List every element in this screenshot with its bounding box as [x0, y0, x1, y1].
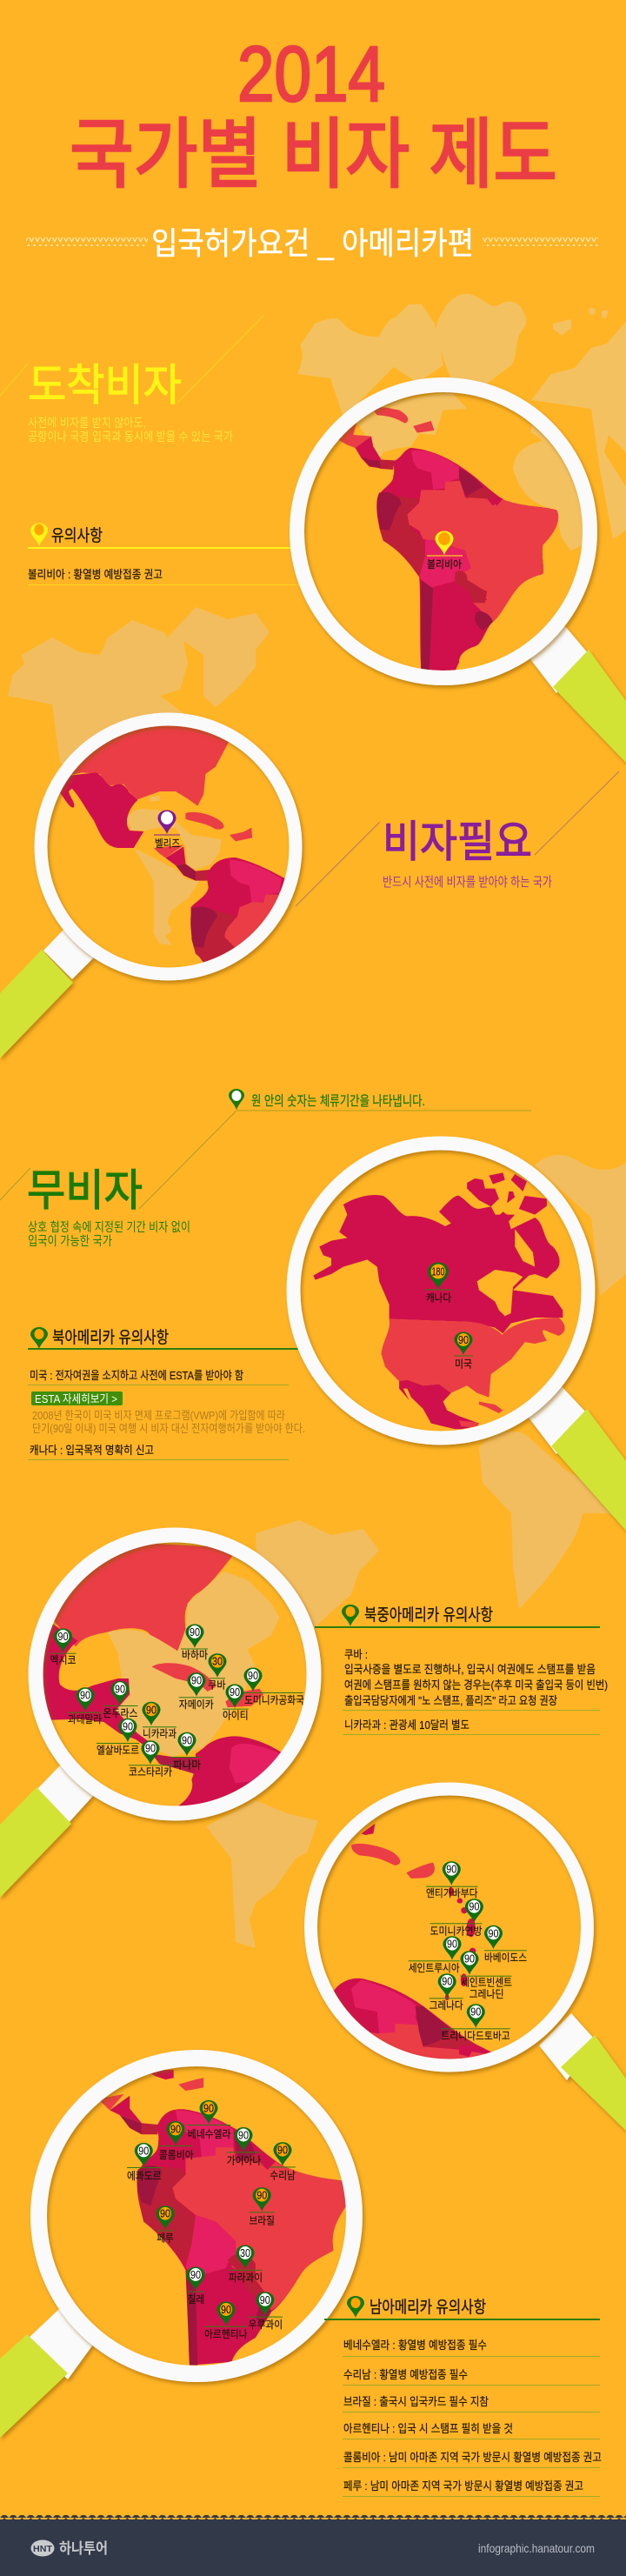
pin: Dominican Republic: 90: [248, 1670, 258, 1682]
notes list: South America: 브라질 : 출국시 입국카드 필수 지참: [343, 2395, 489, 2408]
pin: Chile: [186, 2266, 205, 2306]
pin: Venezuela: 베네수엘라: [188, 2128, 230, 2140]
ESTA button: ESTA 자세히보기 >: [35, 1392, 117, 1405]
arrival visa description: [28, 416, 233, 444]
pin: Antigua and Barbuda: 앤티가바부다: [426, 1887, 478, 1899]
pin: Haiti: 아이티: [223, 1710, 249, 1722]
pin: El Salvador: 엘살바도르: [97, 1745, 139, 1757]
pin: Venezuela: [188, 2100, 230, 2140]
pin: Costa Rica: 90: [145, 1743, 156, 1755]
pin: Brazil: 브라질: [250, 2214, 275, 2226]
pin: Costa Rica: 코스타리카: [129, 1766, 172, 1779]
pin: Dominican Republic: 도미니카공화국: [244, 1694, 304, 1706]
pin: Honduras: [103, 1681, 137, 1719]
magnifier: Central America: [0, 1535, 314, 1898]
pin: Antigua and Barbuda: [426, 1861, 478, 1899]
pin: Jamaica: 자메이카: [179, 1698, 214, 1711]
pin: Saint Vincent and the Grenadines: 세인트빈센트: [461, 1977, 512, 1989]
pin: Bolivia: 볼리비아: [427, 558, 462, 571]
pin: Guyana: [227, 2127, 261, 2166]
pin: Colombia: 90: [170, 2124, 181, 2136]
notes heading: arrival visa: 유의사항: [51, 526, 103, 545]
pin: Canada 180: 캐나다: [426, 1292, 451, 1305]
notes list: South America: 수리남 : 황열병 예방접종 필수: [343, 2368, 468, 2381]
notes heading: North America: [28, 1327, 298, 1350]
pin: Uruguay: 우루과이: [249, 2319, 283, 2331]
pin: USA 90: 미국: [455, 1358, 472, 1371]
pin: Nicaragua: [143, 1702, 176, 1739]
ESTA explanation: [32, 1409, 305, 1435]
note: Cuba: [343, 1648, 608, 1711]
notes heading: South America: [324, 2296, 600, 2320]
notes heading: arrival visa: [28, 524, 293, 549]
pin: Argentina: 아르헨티나: [204, 2328, 248, 2340]
pin: Dominica: 90: [469, 1901, 479, 1913]
pin: Venezuela: 90: [203, 2102, 214, 2114]
section: arrival visa heading: [0, 315, 264, 410]
note: Canada: 캐나다 : 입국목적 명확히 신고: [30, 1444, 154, 1457]
pin: Peru: 90: [160, 2208, 170, 2220]
title: [70, 31, 557, 197]
pin: Haiti: [223, 1684, 249, 1722]
subtitle with zigzag rules: [26, 225, 598, 261]
footer: [0, 2515, 626, 2576]
pin: Barbados: 바베이도스: [484, 1952, 527, 1964]
pin: Grenada: 90: [442, 1976, 452, 1988]
pin: Suriname: 90: [277, 2145, 288, 2157]
pin: Haiti: 90: [230, 1686, 240, 1698]
pin: Cuba: 쿠바: [208, 1679, 226, 1692]
pin: Bolivia: [427, 531, 463, 571]
pin: Brazil: [249, 2187, 275, 2226]
pin: Mexico: [50, 1628, 77, 1666]
pin: Cuba: [208, 1653, 226, 1692]
pin: Barbados: [484, 1925, 527, 1964]
pin: Belize: 벨리즈: [155, 838, 180, 850]
pin: Trinidad and Tobago: 90: [470, 2006, 481, 2019]
notes list: South America: 페루 : 남미 아마존 지역 국가 방문시 황열병 예방접종 권고: [343, 2479, 583, 2493]
title: 국가별 비자 제도: [70, 111, 557, 197]
pin: Barbados: 90: [489, 1927, 499, 1939]
pin: Ecuador: 90: [138, 2145, 149, 2157]
pin: Antigua and Barbuda: 90: [446, 1864, 456, 1876]
ESTA explanation: 단기(90일 이내) 미국 여행 시 비자 대신 전자여행허가를 받아야 한다.: [32, 1422, 305, 1435]
pin: Costa Rica: [129, 1740, 172, 1779]
pin: Canada 180: [425, 1263, 452, 1305]
pin: Paraguay: 30: [240, 2247, 250, 2259]
pin: Saint Vincent and the Grenadines: 90: [464, 1953, 475, 1965]
pin: Saint Vincent and the Grenadines: [460, 1951, 512, 2000]
pin: Mexico: 90: [57, 1631, 69, 1643]
pins: South America labels: [127, 2100, 296, 2340]
visa free description: 상호 협정 속에 지정된 기간 비자 없이: [28, 1220, 190, 1235]
pin: USA 90: [454, 1332, 473, 1371]
arrival visa description: 공항이나 국경 입국과 동시에 받을 수 있는 국가: [28, 430, 233, 444]
pin: Guatemala: [68, 1687, 102, 1725]
pin: Paraguay: 파라과이: [229, 2272, 263, 2284]
pin: Canada 180: 180: [431, 1266, 445, 1278]
magnifier: Belize: [0, 719, 296, 1058]
world map backdrop: upper right: [297, 294, 626, 539]
pin: Mexico: 멕시코: [50, 1654, 77, 1666]
pin: Honduras: 90: [115, 1683, 125, 1695]
pin: Guyana: 90: [238, 2129, 249, 2141]
pin: Brazil: 90: [256, 2190, 267, 2202]
section: visa required heading: 비자필요: [383, 818, 532, 866]
pin: Chile: 칠레: [188, 2293, 204, 2306]
pin: Belize: [154, 811, 180, 850]
pins: Central America labels: [50, 1625, 304, 1779]
note: USA ESTA: 미국 : 전자여권을 소지하고 사전에 ESTA를 받아야 함: [30, 1369, 243, 1382]
pin: USA 90: 90: [458, 1334, 469, 1346]
pin: Guatemala: 과테말라: [68, 1713, 102, 1725]
title: 2014: [237, 31, 385, 118]
logo: HNT: HNT: [33, 2544, 53, 2554]
notes list: South America: 아르헨티나 : 입국 시 스탬프 필히 받을 것: [343, 2422, 513, 2435]
section: visa required heading: [296, 771, 619, 906]
footer url: infographic.hanatour.com: [478, 2541, 595, 2555]
pin: Argentina: [204, 2301, 248, 2340]
magnifier: South America: [0, 2058, 355, 2438]
pin: Bahamas: [181, 1625, 208, 1661]
section: arrival visa heading: 도착비자: [28, 361, 182, 410]
logo: HNT: 하나투어: [59, 2540, 108, 2557]
pin: Jamaica: [179, 1672, 214, 1711]
pin: Paraguay: [229, 2246, 263, 2284]
pin: Chile: 90: [190, 2269, 201, 2281]
pins: Caribbean labels: [409, 1861, 527, 2042]
notes list: South America: 베네수엘라 : 황열병 예방접종 필수: [343, 2339, 487, 2352]
note: Cuba: 출입국담당자에게 "노 스탬프, 플리즈" 라고 요청 권장: [344, 1694, 557, 1707]
logo: HNT: [31, 2539, 108, 2557]
visa free description: [28, 1220, 190, 1249]
pin: Peru: [156, 2206, 174, 2244]
pin: Peru: 페루: [156, 2232, 174, 2244]
pin: Saint Lucia: [409, 1936, 461, 1974]
world map backdrop: right and centre lower: [206, 1155, 626, 1948]
pin: Trinidad and Tobago: [441, 2004, 510, 2042]
magnifier: North America: [294, 1143, 626, 1531]
pin: El Salvador: 90: [123, 1720, 133, 1732]
pin: Suriname: [270, 2142, 296, 2181]
note: Cuba: 쿠바 :: [344, 1648, 368, 1661]
note: Nicaragua: 니카라과 : 관광세 10달러 별도: [344, 1718, 470, 1732]
notes heading: North and Central America: [315, 1605, 600, 1628]
pin: Saint Vincent and the Grenadines: 그레나딘: [470, 1988, 504, 2000]
pin: Trinidad and Tobago: 트리니다드토바고: [441, 2030, 510, 2042]
pin: Cuba: 30: [212, 1656, 223, 1668]
pin: Saint Lucia: 세인트루시아: [409, 1962, 460, 1974]
pin: Panama: 파나마: [173, 1758, 201, 1771]
pin: Panama: 90: [182, 1734, 192, 1746]
pin: Nicaragua: 니카라과: [143, 1727, 176, 1739]
pin: Bahamas: 바하마: [182, 1649, 208, 1661]
subtitle with zigzag rules: 입국허가요건 _ 아메리카편: [151, 225, 474, 261]
section: visa free heading: 무비자: [27, 1166, 143, 1215]
note: Cuba: 입국사증을 별도로 진행하나, 입국시 여권에도 스탬프를 받음: [344, 1663, 596, 1676]
world map backdrop: left middle: [8, 607, 270, 783]
pin: Dominican Republic: [243, 1668, 304, 1706]
pin: Uruguay: 90: [260, 2294, 270, 2306]
pin: Guyana: 가이아나: [227, 2154, 261, 2166]
pin: Colombia: [159, 2121, 194, 2161]
pin: Uruguay: [249, 2292, 283, 2331]
pin: Nicaragua: 90: [146, 1704, 156, 1716]
notes heading: South America: 남아메리카 유의사항: [370, 2298, 486, 2317]
visa required description: 반드시 사전에 비자를 받아야 하는 국가: [383, 875, 552, 890]
legend note: numbers mean stay length: 원 안의 숫자는 체류기간을 나타냅니다.: [251, 1093, 425, 1109]
pin: Guatemala: 90: [80, 1690, 90, 1702]
ESTA explanation: 2008년 한국이 미국 비자 면제 프로그램(VWP)에 가입함에 따라: [32, 1409, 285, 1422]
notes list: South America: [343, 2339, 602, 2497]
pin: Argentina: 90: [221, 2304, 231, 2316]
pin: Dominica: [430, 1899, 483, 1937]
visa free description: 입국이 가능한 국가: [28, 1234, 112, 1249]
note: Bolivia: 볼리비아 : 황열병 예방접종 권고: [28, 568, 163, 581]
pin: El Salvador: [97, 1718, 139, 1757]
pin: Honduras: 온두라스: [103, 1707, 137, 1719]
pin: Colombia: 콜롬비아: [159, 2149, 194, 2161]
pin: Grenada: [430, 1973, 463, 2012]
pin: Grenada: 그레나다: [430, 1999, 463, 2012]
arrival visa description: 사전에 비자를 받지 않아도,: [28, 416, 146, 430]
pin: Dominica: 도미니카연방: [430, 1925, 483, 1937]
pin: Bahamas: 90: [190, 1626, 200, 1638]
pin: Panama: [171, 1732, 201, 1771]
pin: Saint Lucia: 90: [447, 1939, 457, 1951]
notes heading: North America: 북아메리카 유의사항: [52, 1328, 169, 1347]
pin: Jamaica: 90: [191, 1675, 202, 1687]
legend note: numbers mean stay length: [0, 1089, 531, 1209]
magnifier: Caribbean: [311, 1789, 626, 2131]
magnifier: Bolivia: [297, 384, 626, 763]
notes heading: North and Central America: 북중아메리카 유의사항: [364, 1605, 493, 1625]
pin: Ecuador: [127, 2143, 162, 2182]
pin: Ecuador: 에콰도르: [127, 2170, 162, 2182]
pin: Suriname: 수리남: [270, 2170, 296, 2182]
